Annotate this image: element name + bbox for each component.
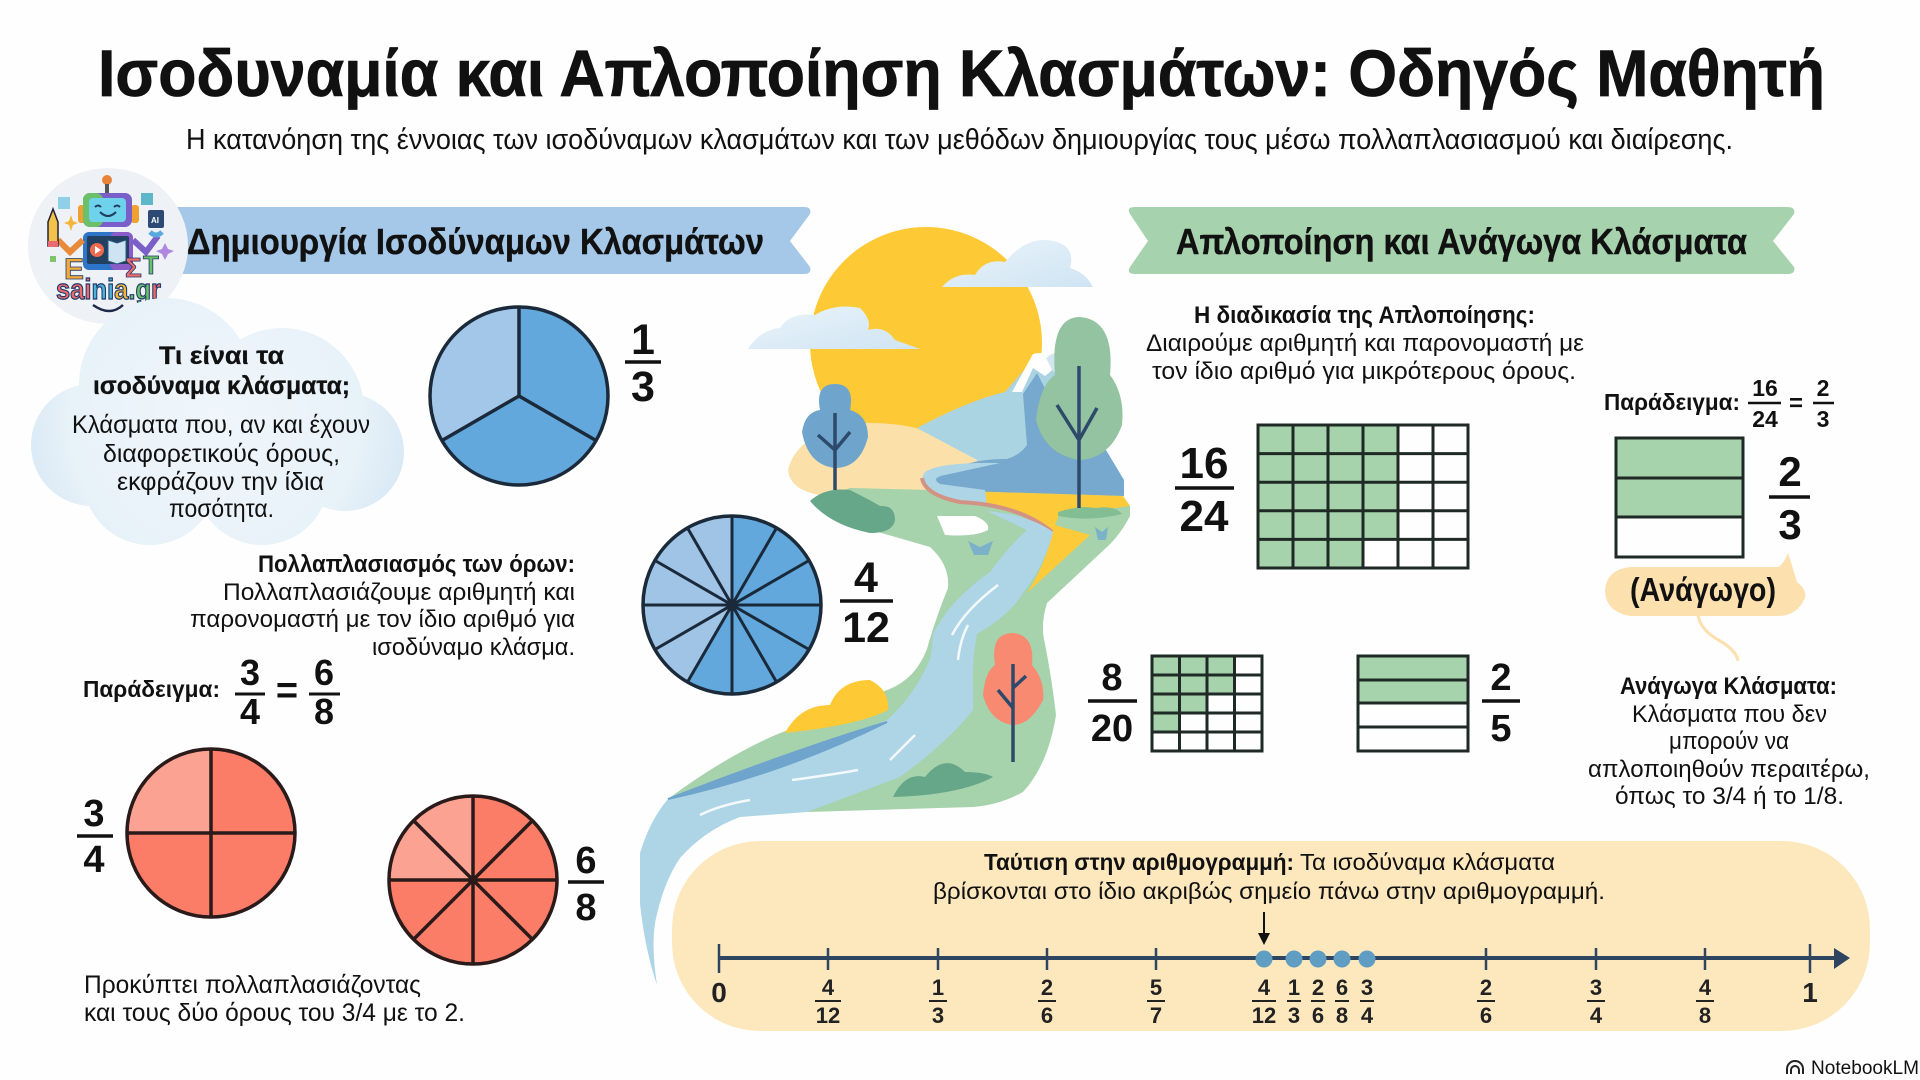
text: multiplication of terms (190, 551, 575, 661)
example: 16/24 = 2/3 (1604, 375, 1834, 432)
fraction: 2/5: 2 (1490, 657, 1512, 699)
number line labels: 5 (1150, 975, 1162, 1000)
fraction: 4/12 (840, 554, 893, 652)
text: multiplying both terms (84, 971, 465, 1027)
number line labels: 1 (1802, 977, 1818, 1008)
text: simplification process: Η διαδικασία της Απλοποίησης: (1194, 302, 1535, 329)
fraction: 1/3: 3 (631, 363, 655, 411)
fraction: 16/24 (1175, 439, 1234, 541)
number line labels: 7 (1150, 1003, 1162, 1028)
number line labels: 8 (1336, 1003, 1348, 1028)
logo: sainia.gr robot badge: AI (151, 216, 159, 225)
text: number line note: βρίσκονται στο ίδιο ακριβώς σημείο πάνω στην αριθμογραμμή. (933, 878, 1605, 904)
example: 16/24 = 2/3: 16 (1752, 375, 1778, 401)
pie chart: three quarters (127, 749, 295, 917)
number line labels: 4 (1699, 975, 1712, 1000)
banner: creating equivalent fractions: Δημιουργία Ισοδύναμων Κλασμάτων (187, 221, 764, 262)
fraction: 3/4: 3 (83, 793, 105, 835)
fraction: 2/5: 5 (1490, 708, 1512, 750)
number line labels: 12 (1252, 1003, 1276, 1028)
example: 16/24 = 2/3: 3 (1817, 406, 1829, 432)
panel: cloud with definition (31, 298, 404, 545)
text: irreducible fractions definition: Κλάσματα που δεν (1632, 701, 1827, 728)
panel: cloud with definition: ποσότητα. (169, 495, 274, 523)
grid: 16/24 (1258, 425, 1468, 568)
example: 16/24 = 2/3: 2 (1817, 375, 1829, 401)
logo: sainia.gr robot badge: Ε (64, 253, 84, 286)
fraction: 1/3: 1 (631, 316, 655, 364)
text: irreducible fractions definition: μπορούν να (1669, 728, 1789, 755)
logo: sainia.gr robot badge: Σ (125, 252, 142, 283)
fraction: 8/20: 20 (1091, 708, 1133, 750)
example: 3/4 = 6/8: 6 (314, 652, 334, 693)
number line labels: 6 (1312, 1003, 1324, 1028)
number line labels: 1 (1288, 975, 1300, 1000)
banner: simplification and irreducible fractions: Απλοποίηση και Ανάγωγα Κλάσματα (1176, 221, 1747, 262)
number line labels: 1 (932, 975, 944, 1000)
panel: cloud with definition: ισοδύναμα κλάσματα; (93, 372, 350, 400)
fraction: 6/8 (568, 840, 604, 929)
subtitle: Η κατανόηση της έννοιας των ισοδύναμων κλασμάτων και των μεθόδων δημιουργίας τους μέσω πολλαπλασιασμού και διαίρεσης. (186, 124, 1733, 156)
number line labels: 4 (1590, 1003, 1603, 1028)
number line labels: 3 (1361, 975, 1373, 1000)
number line labels: 6 (1336, 975, 1348, 1000)
marker dots (1256, 950, 1376, 968)
number line labels: 4 (822, 975, 835, 1000)
pie chart: four twelfths (643, 516, 821, 694)
panel: cloud with definition: Τι είναι τα (159, 342, 285, 370)
arrow: to shared point (1258, 912, 1270, 945)
callout: irreducible (1605, 553, 1805, 661)
pie chart: six eighths (389, 796, 557, 964)
panel: number line (672, 841, 1870, 1031)
example: 16/24 = 2/3: = (1789, 390, 1803, 417)
number line labels: 6 (1480, 1003, 1492, 1028)
text: multiplication of terms: ισοδύναμο κλάσμα. (372, 634, 575, 661)
bar model: 2/5 (1358, 656, 1468, 751)
fraction: 2/3: 2 (1778, 448, 1802, 495)
fraction: 16/24: 24 (1180, 492, 1229, 541)
example: 3/4 = 6/8: Παράδειγμα: (83, 676, 220, 702)
text: multiplying both terms: και τους δύο όρους του 3/4 με το 2. (84, 999, 465, 1027)
example: 16/24 = 2/3: 24 (1752, 406, 1778, 432)
fraction: 6/8: 6 (575, 840, 597, 882)
panel: cloud with definition: εκφράζουν την ίδια (117, 468, 324, 496)
text: number line note: Τα ισοδύναμα κλάσματα (1300, 849, 1555, 875)
number line labels: 6 (1041, 1003, 1053, 1028)
text: simplification process: τον ίδιο αριθμό για μικρότερους όρους. (1152, 358, 1576, 385)
example: 3/4 = 6/8: 8 (314, 691, 334, 732)
example: 3/4 = 6/8: = (276, 670, 298, 712)
panel: cloud with definition: διαφορετικούς όρους, (103, 440, 340, 468)
fraction: 2/3 (1769, 448, 1810, 548)
watermark: NotebookLM: NotebookLM (1811, 1058, 1919, 1079)
callout: irreducible: (Ανάγωγο) (1630, 571, 1776, 608)
text: multiplication of terms: παρονομαστή με τον ίδιο αριθμό για (190, 606, 575, 633)
number line labels: 2 (1480, 975, 1492, 1000)
number line labels: 3 (932, 1003, 944, 1028)
title: Ισοδυναμία και Απλοποίηση Κλασμάτων: Οδηγός Μαθητή (98, 36, 1825, 110)
text: irreducible fractions definition: όπως το 3/4 ή το 1/8. (1615, 783, 1844, 810)
number line labels: 12 (816, 1003, 840, 1028)
text: number line note (933, 849, 1605, 904)
text: multiplication of terms: Πολλαπλασιασμός των όρων: (258, 551, 575, 578)
text: number line note: Ταύτιση στην αριθμογραμμή: (984, 849, 1294, 875)
text: irreducible fractions definition: απλοποιηθούν περαιτέρω, (1588, 756, 1870, 783)
example: 3/4 = 6/8: 4 (240, 691, 260, 732)
number line axis (719, 944, 1850, 973)
logo: sainia.gr robot badge (28, 168, 188, 324)
text: irreducible fractions definition (1588, 673, 1870, 810)
panel: cloud with definition: Κλάσματα που, αν και έχουν (72, 411, 370, 439)
fraction: 6/8: 8 (575, 887, 597, 929)
fraction: 8/20: 8 (1101, 657, 1123, 699)
banner: simplification and irreducible fractions (1129, 207, 1794, 274)
fraction: 1/3 (625, 316, 661, 411)
number line labels (711, 975, 1818, 1028)
fraction: 16/24: 16 (1180, 439, 1228, 488)
bar model: 2/3 (1616, 438, 1743, 557)
number line labels: 0 (711, 977, 727, 1008)
text: simplification process: Διαιρούμε αριθμητή και παρονομαστή με (1146, 330, 1584, 357)
text: multiplication of terms: Πολλαπλασιάζουμε αριθμητή και (223, 579, 575, 606)
grid: 8/20 (1152, 656, 1262, 751)
number line labels: 3 (1590, 975, 1602, 1000)
text: simplification process (1146, 302, 1584, 385)
fraction: 4/12: 4 (854, 554, 878, 602)
number line labels: 8 (1699, 1003, 1711, 1028)
pie chart: one third (430, 307, 608, 485)
fraction: 4/12: 12 (842, 604, 890, 652)
number line labels: 2 (1312, 975, 1324, 1000)
example: 3/4 = 6/8: 3 (240, 652, 260, 693)
logo: sainia.gr robot badge: sainia.gr (56, 274, 161, 306)
fraction: 3/4 (77, 793, 113, 881)
number line labels: 4 (1258, 975, 1271, 1000)
fraction: 2/5 (1482, 657, 1520, 750)
fraction: 2/3: 3 (1778, 501, 1802, 548)
text: multiplying both terms: Προκύπτει πολλαπλασιάζοντας (84, 971, 421, 999)
illustration: landscape with sun and river (640, 227, 1130, 985)
banner: creating equivalent fractions (170, 207, 810, 274)
example: 3/4 = 6/8 (83, 652, 340, 732)
text: irreducible fractions definition: Ανάγωγα Κλάσματα: (1620, 673, 1837, 700)
fraction: 3/4: 4 (83, 839, 105, 881)
number line labels: 3 (1288, 1003, 1300, 1028)
logo: sainia.gr robot badge: Τ (143, 250, 159, 280)
number line labels: 2 (1041, 975, 1053, 1000)
fraction: 8/20 (1088, 657, 1137, 750)
number line labels: 4 (1361, 1003, 1374, 1028)
example: 16/24 = 2/3: Παράδειγμα: (1604, 389, 1740, 415)
